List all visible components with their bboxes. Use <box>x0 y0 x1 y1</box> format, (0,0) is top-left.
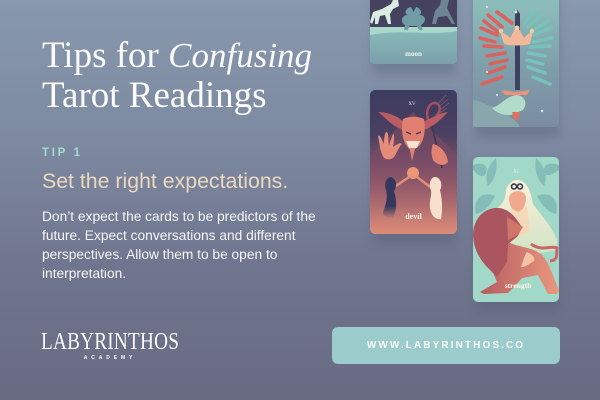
crab <box>402 7 425 30</box>
card name: moon <box>405 50 422 58</box>
tip body text: interpretation. <box>42 266 126 281</box>
second hand <box>432 144 448 165</box>
dark hill <box>473 100 520 127</box>
card: the moon <box>370 0 457 64</box>
title: Tarot Readings <box>42 75 266 116</box>
website button: WWW.LABYRINTHOS.CO <box>367 340 525 351</box>
card: swords <box>473 0 559 127</box>
crown <box>500 27 533 46</box>
infinity symbol <box>512 184 523 189</box>
card numeral: XV <box>408 102 416 107</box>
sword guard <box>501 90 530 95</box>
dog <box>432 0 455 24</box>
woman hair and body <box>497 180 557 256</box>
logo subtitle: ACADEMY <box>84 355 136 361</box>
card: strength <box>473 157 559 302</box>
staff <box>427 103 440 120</box>
chain and orb <box>407 167 419 179</box>
hand <box>378 132 402 159</box>
tip body text: future. Expect conversations and different <box>42 228 296 243</box>
card name: strength <box>505 281 532 290</box>
sword blade <box>515 10 520 90</box>
title <box>42 35 312 116</box>
tip heading: Set the right expectations. <box>42 169 288 193</box>
leaves <box>473 158 559 214</box>
tip body text: Don’t expect the cards to be predictors of the <box>42 209 316 224</box>
card numeral: XI <box>513 170 519 175</box>
title: Tips for Confusing <box>42 35 312 76</box>
wolf <box>370 0 399 24</box>
teal fern <box>525 12 552 84</box>
tip body text <box>42 209 316 281</box>
lion <box>480 240 559 294</box>
right figure <box>430 177 442 219</box>
woman hand <box>521 252 534 267</box>
tip body text: perspectives. Allow them to be open to <box>42 247 277 262</box>
card: the devil <box>370 90 457 234</box>
hand <box>492 95 525 115</box>
red fern <box>480 12 512 84</box>
logo: Labyrinthos Academy <box>41 329 179 361</box>
lion tail <box>531 244 557 261</box>
left figure <box>383 177 396 218</box>
logo wordmark: LABYRINTHOS <box>41 329 179 355</box>
devil mask with horns <box>378 112 404 130</box>
website button <box>332 327 560 364</box>
card shadows <box>372 0 559 311</box>
tip label: TIP 1 <box>42 147 83 159</box>
card name: devil <box>405 212 422 221</box>
